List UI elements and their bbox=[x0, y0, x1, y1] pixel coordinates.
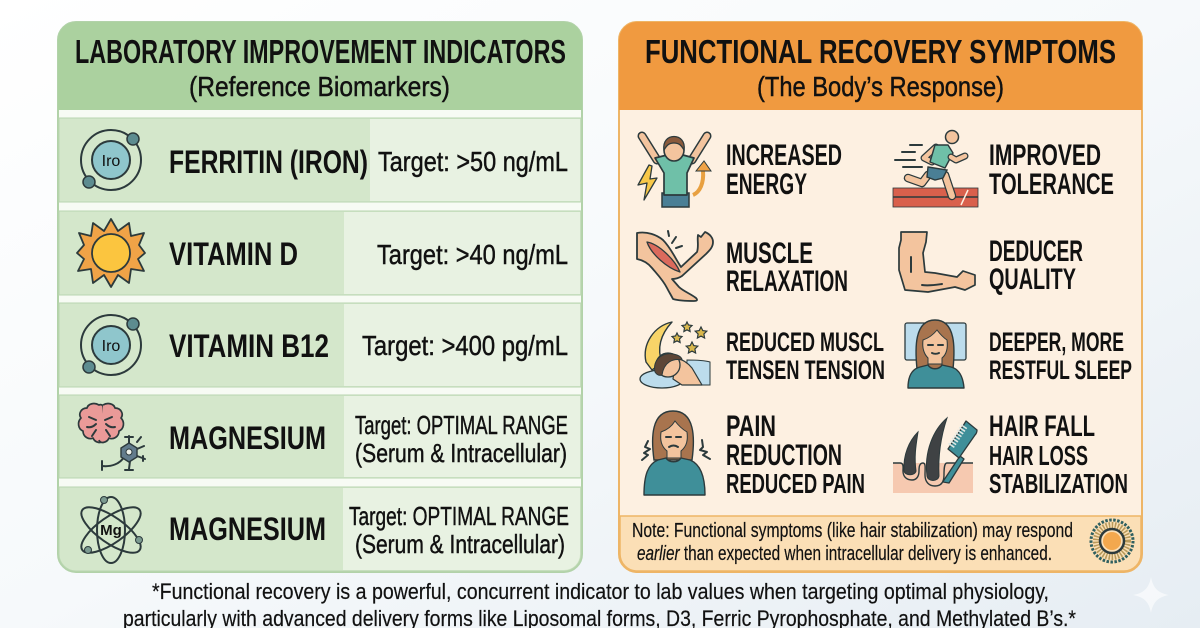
row: magnesium brain: MAGNESIUM bbox=[169, 420, 326, 456]
symptom: reduced muscle tension: TENSEN TENSION bbox=[726, 355, 885, 385]
symptom: increased energy: INCREASED bbox=[726, 139, 842, 172]
icon: b12 atom: Iro bbox=[102, 338, 120, 355]
row: vitamin b12: Target: >400 pg/mL bbox=[362, 330, 568, 361]
symptom: muscle relaxation bbox=[637, 231, 848, 301]
row: magnesium brain: Target: OPTIMAL RANGE bbox=[355, 410, 568, 440]
icon: runner on track bbox=[893, 130, 978, 207]
panel heading: laboratory bbox=[58, 22, 582, 110]
row: magnesium brain bbox=[59, 395, 581, 478]
icon: sparkle watermark bbox=[1133, 577, 1169, 613]
symptom: hair fall stabilization bbox=[893, 410, 1128, 499]
symptom: pain reduction: REDUCTION bbox=[726, 439, 842, 472]
symptom: deducer quality bbox=[899, 232, 1083, 296]
panel heading: functional bbox=[619, 22, 1142, 110]
symptom: pain reduction bbox=[642, 410, 865, 499]
symptom: improved tolerance: TOLERANCE bbox=[989, 168, 1114, 201]
symptom: improved tolerance bbox=[893, 130, 1114, 207]
symptom: hair fall stabilization: HAIR LOSS bbox=[989, 440, 1088, 471]
icon: brain and neuron bbox=[79, 404, 145, 470]
icon: flexed arm bbox=[899, 232, 975, 292]
symptom: muscle relaxation: RELAXATION bbox=[726, 265, 848, 298]
icon: woman with headache bbox=[642, 411, 710, 495]
row: magnesium atom bbox=[59, 487, 581, 571]
symptom: pain reduction: REDUCED PAIN bbox=[726, 468, 865, 499]
symptom: deducer quality: QUALITY bbox=[989, 263, 1076, 296]
row: magnesium atom: MAGNESIUM bbox=[169, 511, 326, 547]
symptom: reduced muscle tension: REDUCED MUSCL bbox=[726, 327, 884, 357]
panel heading: laboratory: (Reference Biomarkers) bbox=[189, 71, 450, 102]
panel: functional recovery symptoms bbox=[619, 22, 1142, 572]
symptom: increased energy bbox=[638, 136, 842, 207]
symptom: muscle relaxation: MUSCLE bbox=[726, 237, 813, 270]
row: ferritin: Target: >50 ng/mL bbox=[378, 146, 568, 177]
row: ferritin: FERRITIN (IRON) bbox=[169, 144, 368, 180]
symptom: reduced muscle tension bbox=[640, 322, 885, 388]
icon: person with raised arms bbox=[638, 136, 711, 207]
icon: iron atom: Iro bbox=[102, 153, 120, 170]
note box: earlier than expected when intracellular delivery is enhanced. bbox=[637, 543, 1052, 565]
symptom: pain reduction: PAIN bbox=[726, 410, 776, 443]
footnote bbox=[123, 579, 1076, 628]
icon: sun bbox=[77, 219, 145, 287]
row: magnesium atom: (Serum & Intracellular) bbox=[355, 529, 565, 559]
note box: Note: Functional symptoms (like hair stabilization) may respond bbox=[632, 520, 1073, 542]
icon: moon and sleeping person bbox=[640, 322, 710, 388]
icon: magnesium atom bbox=[75, 496, 147, 563]
footnote: *Functional recovery is a powerful, concurrent indicator to lab values when targeting optimal physiology, bbox=[152, 579, 1049, 604]
icon: woman on pillow bbox=[905, 320, 966, 388]
row: vitamin d: Target: >40 ng/mL bbox=[377, 239, 568, 270]
symptom: deducer quality: DEDUCER bbox=[989, 235, 1083, 268]
symptom: hair fall stabilization: HAIR FALL bbox=[989, 410, 1095, 443]
icon: liposome bbox=[1091, 520, 1133, 562]
icon: arm and leg muscle bbox=[637, 231, 713, 301]
row: magnesium brain: (Serum & Intracellular) bbox=[355, 438, 567, 468]
icon: b12 atom bbox=[81, 315, 141, 375]
panel heading: laboratory: LABORATORY IMPROVEMENT INDICATORS bbox=[75, 33, 566, 70]
symptom: improved tolerance: IMPROVED bbox=[989, 139, 1101, 172]
row: ferritin bbox=[59, 118, 581, 202]
icon: iron atom bbox=[81, 130, 141, 190]
panel: laboratory improvement indicators bbox=[58, 22, 582, 572]
symptom: deeper sleep: DEEPER, MORE bbox=[989, 327, 1124, 357]
row: vitamin d: VITAMIN D bbox=[169, 236, 298, 272]
row: vitamin b12 bbox=[59, 303, 581, 387]
row: vitamin d bbox=[59, 211, 581, 295]
symptom: deeper sleep bbox=[905, 320, 1132, 388]
row: magnesium atom: Target: OPTIMAL RANGE bbox=[349, 501, 569, 531]
panel heading: functional: (The Body’s Response) bbox=[757, 71, 1004, 102]
note box bbox=[620, 516, 1141, 571]
symptom: hair fall stabilization: STABILIZATION bbox=[989, 468, 1128, 499]
icon: magnesium atom: Mg bbox=[100, 522, 122, 539]
icon: hair follicles and comb bbox=[893, 418, 977, 493]
symptom: increased energy: ENERGY bbox=[726, 168, 807, 201]
row: vitamin b12: VITAMIN B12 bbox=[169, 328, 329, 364]
